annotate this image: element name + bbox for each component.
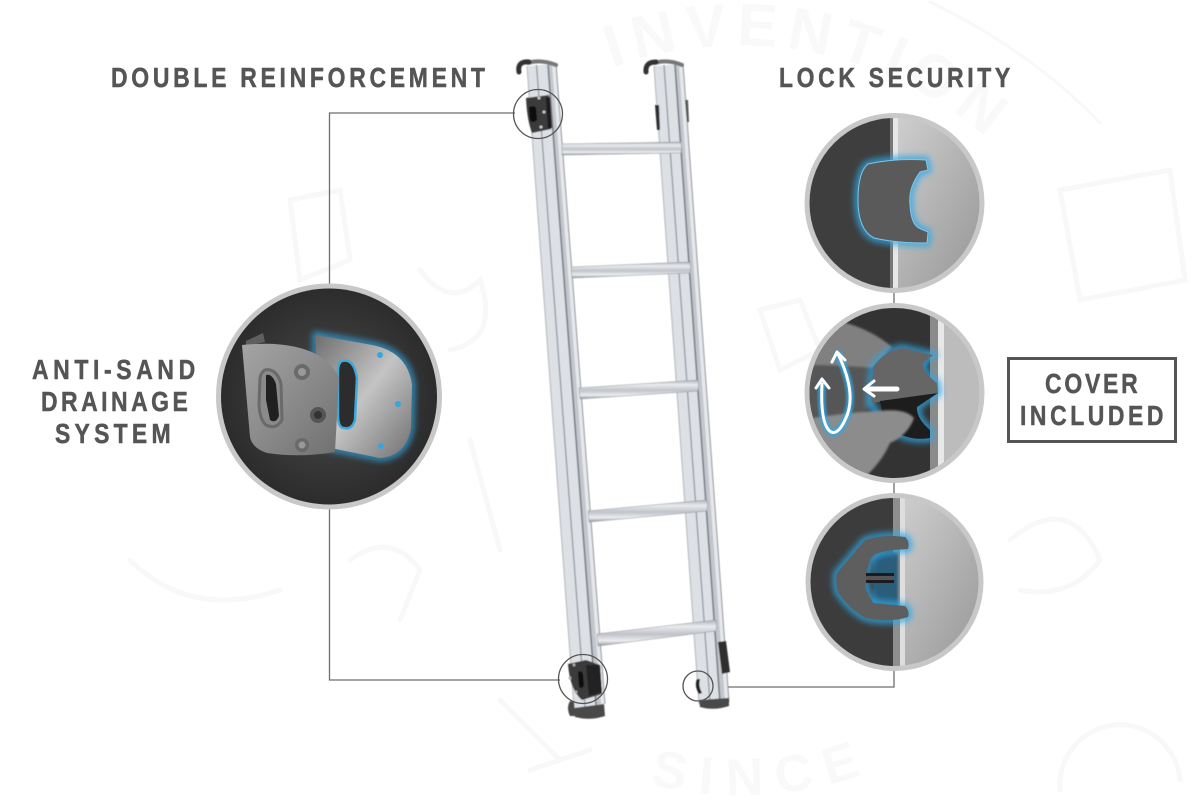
small lock: [696, 679, 702, 694]
lock cover open: [836, 536, 909, 620]
ladder: [519, 61, 730, 719]
callout: cover included: INCLUDED: [1020, 401, 1163, 432]
feet: [568, 698, 729, 719]
top plate: [526, 95, 552, 133]
title: double reinforcement: DOUBLE REINFORCEMENT: [111, 63, 485, 94]
left rail: [527, 64, 605, 708]
label: anti-sand drainage system: SYSTEM: [55, 419, 171, 450]
right rail upper clips: [655, 105, 660, 130]
panel: lock closed: [804, 113, 984, 293]
thumb: [813, 408, 915, 474]
back plate: [316, 335, 412, 458]
connector lines: [330, 113, 894, 687]
top finger: [814, 322, 892, 368]
panel: anti-sand drainage detail: [216, 284, 442, 510]
lock cover closed: [858, 160, 928, 243]
title: lock security: LOCK SECURITY: [779, 63, 1010, 94]
label: anti-sand drainage system: DRAINAGE: [41, 387, 188, 418]
panel: turning the lock by hand: [804, 303, 984, 483]
hand background: [810, 346, 871, 426]
cast bracket: [242, 333, 339, 455]
right rail lower clip: [718, 641, 730, 674]
blue recess behind lock: [873, 552, 898, 608]
label: anti-sand drainage system: [32, 355, 195, 450]
panel: lock open: [806, 493, 984, 671]
top hooks: [519, 61, 682, 72]
callout: cover included: [1008, 358, 1176, 442]
lock turning: [870, 348, 938, 439]
callout: cover included: COVER: [1045, 369, 1138, 400]
rungs: [562, 142, 716, 646]
right rail: [654, 64, 729, 704]
bottom plate: [568, 660, 602, 700]
label: anti-sand drainage system: ANTI-SAND: [32, 355, 195, 386]
detail rings on ladder: [514, 90, 713, 704]
icon: rotate and push arrows: [816, 352, 897, 432]
